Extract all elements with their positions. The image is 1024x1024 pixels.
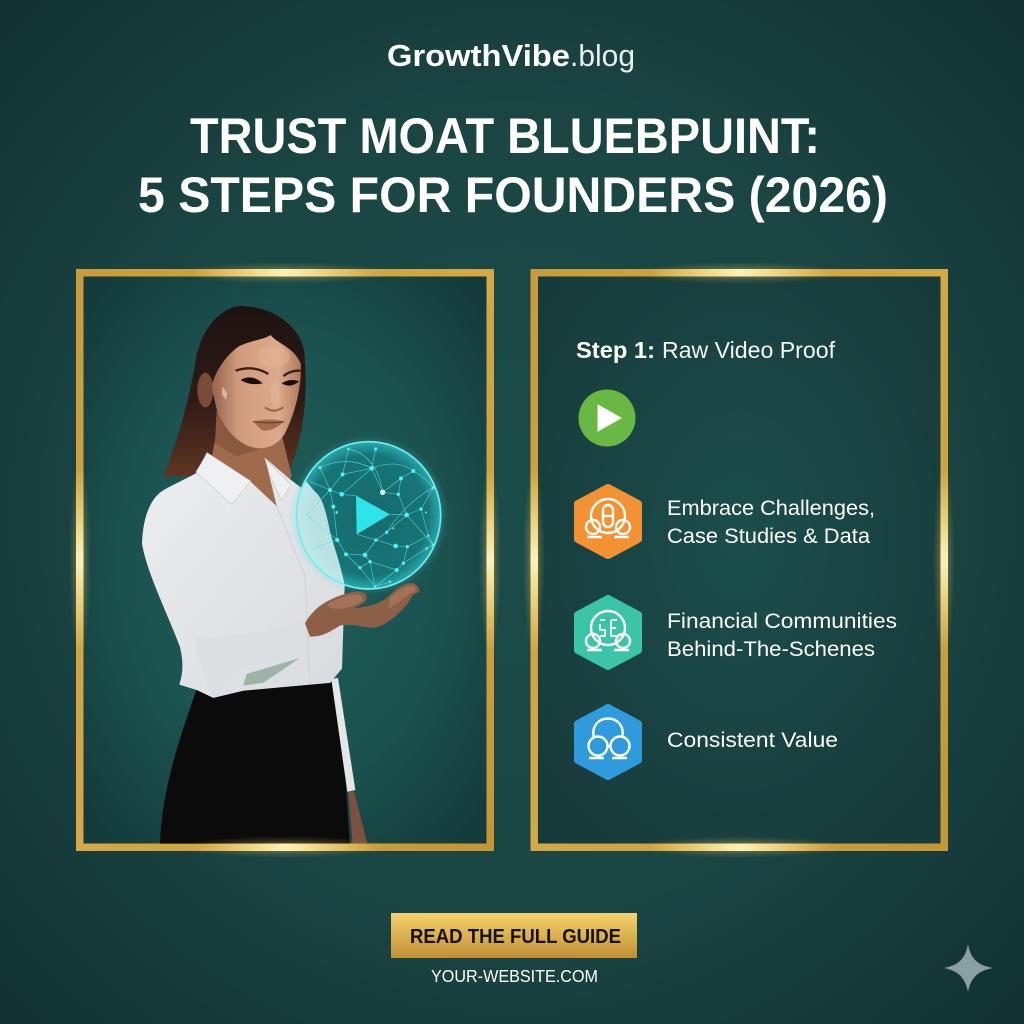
head: [197, 335, 301, 457]
body: [142, 427, 367, 844]
panel: steps: [534, 273, 944, 847]
brand logo: GrowthVibe: [387, 38, 570, 73]
hand: [305, 583, 419, 637]
icon: blue hexagon: [578, 708, 638, 776]
text: embrace challenges: Embrace Challenges,: [667, 496, 875, 520]
placket: [277, 506, 310, 683]
step 1 heading: Step 1:: [576, 337, 655, 363]
network lines: [307, 449, 433, 587]
sphere play icon: [356, 496, 390, 534]
text: financial communities: [667, 609, 897, 661]
under-chin shade: [215, 410, 260, 457]
text: financial communities: Behind-The-Schenes: [667, 637, 875, 661]
text: embrace challenges: Case Studies & Data: [667, 524, 870, 548]
hologram sphere: [289, 435, 449, 637]
forehead highlight: [257, 348, 290, 366]
title: TRUST MOAT BLUEBPUINT:: [190, 108, 820, 164]
icon: green play: [578, 390, 636, 446]
title: 5 STEPS FOR FOUNDERS (2026): [138, 167, 888, 223]
nose ridge: [270, 381, 280, 406]
text: consistent value: Consistent Value: [667, 728, 838, 752]
step 1 heading: Raw Video Proof: [662, 337, 836, 363]
lower arm sleeve strip: [331, 678, 355, 792]
button: read the full guide: [391, 913, 637, 958]
text: embrace challenges: [667, 496, 875, 548]
cheek highlight: [222, 386, 227, 400]
hand highlight: [327, 586, 416, 609]
panel: photo of founder with hologram: [80, 273, 490, 847]
collar: [196, 453, 291, 504]
icon: sparkle: [944, 944, 993, 992]
lower hand: [348, 791, 367, 844]
sphere overlap on shirt: [297, 480, 345, 587]
frame light glows: [69, 262, 955, 858]
sleeve cuff: [213, 698, 214, 699]
network nodes: [318, 447, 435, 588]
sphere rim: [297, 442, 441, 589]
button: read the full guide: READ THE FULL GUIDE: [410, 926, 621, 948]
nose: [265, 407, 283, 411]
lips: [253, 419, 284, 431]
text: financial communities: Financial Communities: [667, 609, 897, 633]
ear: [197, 373, 213, 407]
sleeve shadow: [243, 658, 300, 686]
face: [212, 335, 301, 448]
brows: [236, 368, 301, 376]
neck: [212, 427, 292, 508]
website url: YOUR-WEBSITE.COM: [431, 966, 598, 986]
shirt: [142, 452, 345, 698]
person holding hologram sphere: [142, 306, 449, 844]
icon: orange hexagon: [578, 488, 638, 555]
hair: [163, 306, 306, 477]
eyes: [241, 377, 299, 386]
brand logo: .blog: [570, 38, 635, 73]
skirt: [160, 683, 350, 844]
title: [138, 108, 888, 223]
mouth line: [253, 422, 284, 423]
icon: teal hexagon: [578, 599, 638, 666]
